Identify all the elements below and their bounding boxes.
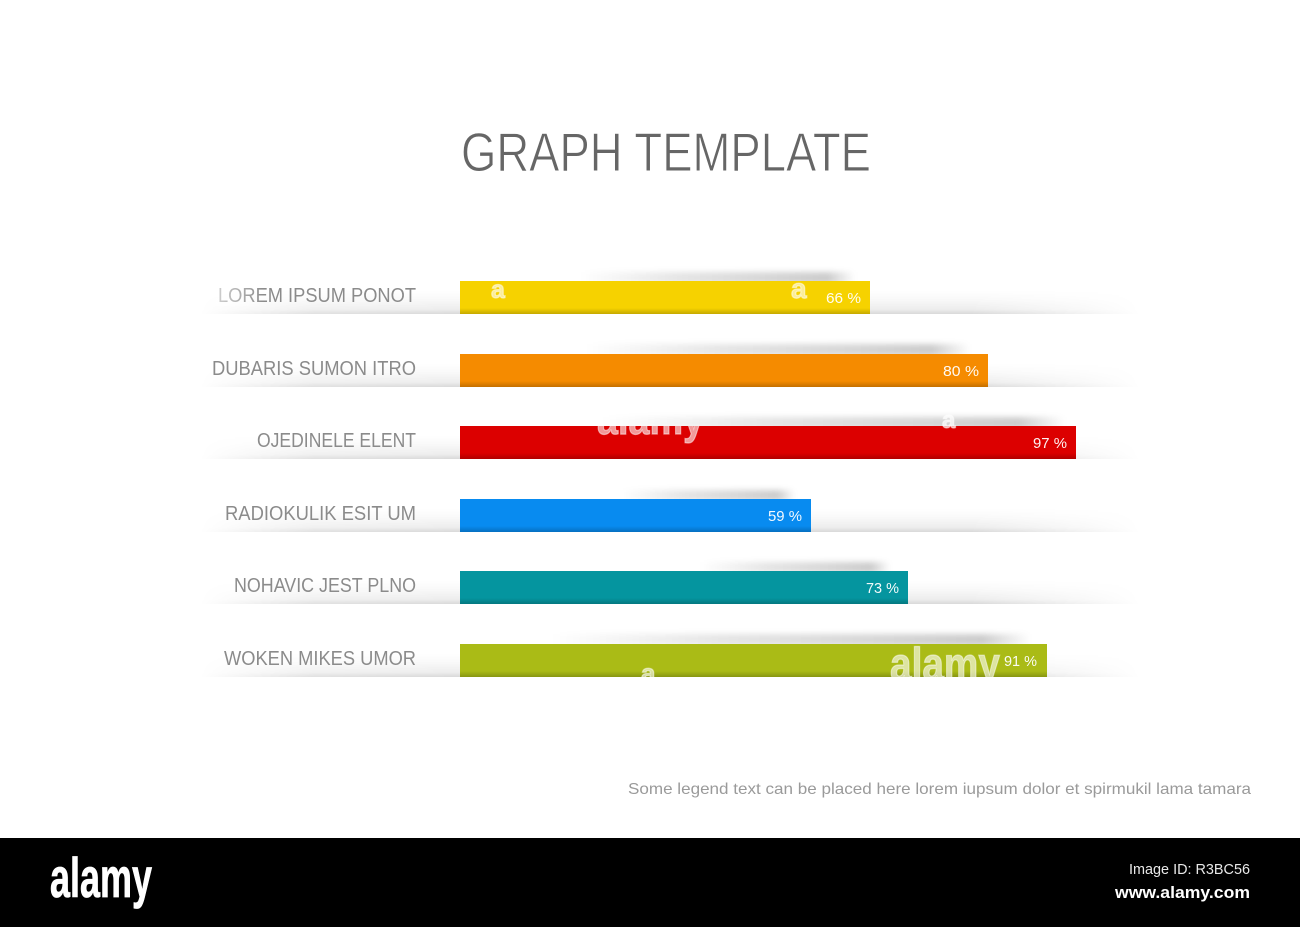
value: 66 %: 66 % xyxy=(826,290,861,307)
bar: yellow 66 % xyxy=(460,281,870,314)
shadow: row 6 xyxy=(200,634,1140,677)
value: 80 %: 80 % xyxy=(943,363,979,380)
label: row 1: LOREM IPSUM PONOT xyxy=(218,285,416,307)
watermark fragments: row 1: a xyxy=(791,273,807,304)
watermark fragments: row 1: a xyxy=(491,276,506,304)
label: row 2: DUBARIS SUMON ITRO xyxy=(212,358,416,380)
legend text: Some legend text can be placed here lorem iupsum dolor et spirmukil lama tamara xyxy=(628,781,1251,798)
shadow: row 4 xyxy=(200,490,1140,532)
shadow: row 3 xyxy=(200,417,1140,459)
watermark fragments: row 3: alamy xyxy=(597,395,704,444)
row 4: Radiokulik Esit Um, 59 % xyxy=(200,490,1140,532)
image id: Image ID: R3BC56 xyxy=(1129,861,1250,878)
shadow: row 5 xyxy=(200,562,1140,604)
value: 97 %: 97 % xyxy=(1033,435,1067,452)
value: 59 %: 59 % xyxy=(768,508,802,525)
label: row 3: OJEDINELE ELENT xyxy=(257,430,416,452)
row 2: Dubaris Sumon Itro, 80 % xyxy=(200,344,1140,387)
label: row 6: WOKEN MIKES UMOR xyxy=(224,648,416,670)
watermark fragments: row 6: a xyxy=(641,658,656,688)
title: GRAPH TEMPLATE xyxy=(461,121,871,183)
website: www.alamy.com xyxy=(1114,883,1250,902)
footer logo: alamy xyxy=(50,846,152,909)
watermark fragments: row 1 xyxy=(491,273,807,304)
chart: horizontal bars xyxy=(200,272,1140,690)
watermark fragments: row 3: a xyxy=(942,407,956,434)
watermark fade over label xyxy=(216,284,264,306)
row 5: Nohavic Jest Plno, 73 % xyxy=(200,562,1140,604)
row 6: Woken Mikes Umor, 91 % xyxy=(224,632,1101,677)
watermark fragments: row 6 xyxy=(641,646,1000,677)
shadow: row 1 xyxy=(200,272,1140,314)
label: row 4: RADIOKULIK ESIT UM xyxy=(225,503,416,525)
shadow: row 2 xyxy=(200,344,1140,387)
footer bar xyxy=(0,838,1300,927)
bar: orange 80 % xyxy=(460,354,988,387)
bar: green 91 % xyxy=(460,644,1047,677)
watermark fragments: row 6: alamy xyxy=(890,638,1000,690)
label: row 5: NOHAVIC JEST PLNO xyxy=(234,575,416,597)
value: 91 %: 91 % xyxy=(1004,653,1037,670)
watermark fragments: row 3 xyxy=(598,415,956,444)
row 1: Lorem Ipsum Ponot, 66 % xyxy=(200,272,1140,314)
footer background xyxy=(0,838,1300,927)
bar: blue 59 % xyxy=(460,499,811,532)
bar: red 97 % xyxy=(460,426,1076,459)
row 3: Ojedinele Elent, 97 % xyxy=(232,414,1101,459)
bar: teal 73 % xyxy=(460,571,908,604)
value: 73 %: 73 % xyxy=(866,580,899,597)
